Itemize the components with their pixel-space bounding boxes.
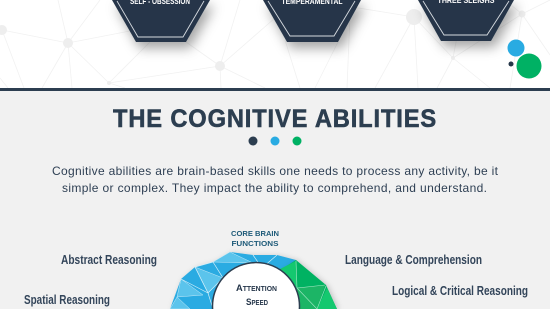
intro paragraph: Cognitive abilities are brain-based skills one needs to process any activity, be it xyxy=(52,164,499,178)
hexagon badge: self-obsession xyxy=(112,0,210,42)
title dots xyxy=(248,136,302,146)
label: language and comprehension: Language & Comprehension xyxy=(345,253,482,267)
wheel: centre circle xyxy=(212,263,300,309)
decorative coloured dots xyxy=(508,40,542,78)
wheel: centre text: Attention xyxy=(236,283,277,294)
label: core brain functions: FUNCTIONS xyxy=(232,239,278,248)
wheel: green segment xyxy=(278,260,337,309)
label: spatial reasoning: Spatial Reasoning xyxy=(24,293,110,307)
top section background xyxy=(0,0,550,88)
navy divider band xyxy=(0,88,550,91)
label: abstract reasoning: Abstract Reasoning xyxy=(61,253,157,267)
label: core brain functions: CORE BRAIN xyxy=(231,229,279,238)
label: core brain functions xyxy=(231,229,279,248)
network background pattern xyxy=(0,0,550,88)
title: THE COGNITIVE ABILITIES xyxy=(113,105,437,132)
intro paragraph: simple or complex. They impact the ability to comprehend, and understand. xyxy=(62,181,487,195)
wheel: centre text: Speed xyxy=(246,297,268,308)
wheel: blue segment xyxy=(170,252,296,309)
hexagon badge: three sleighs xyxy=(418,0,514,41)
hexagon badge: temperamental xyxy=(263,0,361,42)
lower section background xyxy=(0,91,550,309)
wheel: centre text xyxy=(236,283,277,308)
brain function wheel xyxy=(170,252,337,309)
intro paragraph xyxy=(52,164,499,195)
